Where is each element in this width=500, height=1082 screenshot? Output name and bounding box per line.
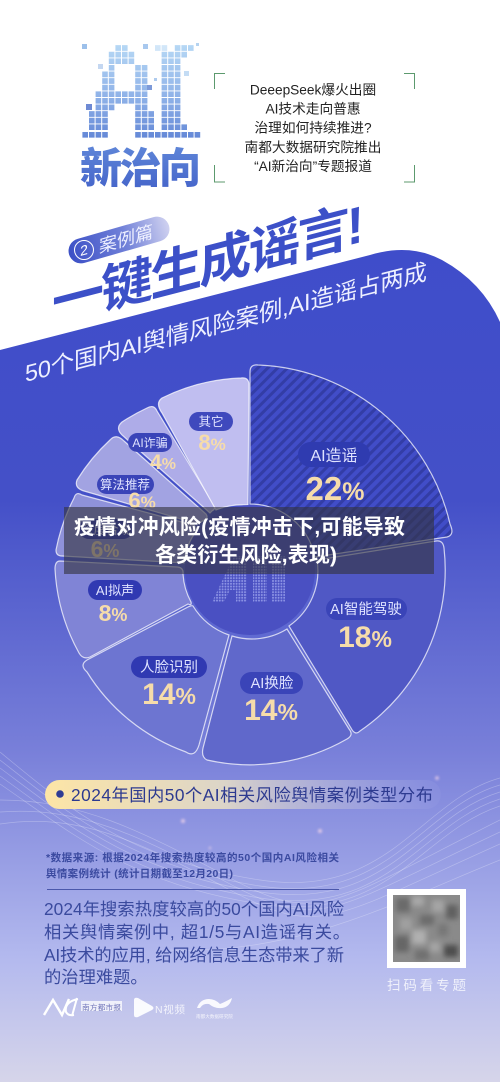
data source note: 舆情案例统计 (统计日期截至12月20日) (46, 867, 233, 880)
data source note (46, 851, 340, 880)
slice: AI诈骗 4%: 4% (150, 451, 176, 474)
logo: 南都大数据研究院: 南都大数据研究院 (196, 1013, 233, 1020)
slice: AI诈骗 4%: AI诈骗 (132, 435, 168, 450)
slice: 其它 8%: 8% (198, 430, 226, 455)
intro copy: DeeepSeek爆火出圈 (250, 82, 376, 98)
scattered pixels (82, 43, 199, 110)
slice: AI造谣 22% (250, 365, 452, 557)
logo: AI pixel mark and 新治向 (80, 43, 201, 192)
pixel letters AI (82, 48, 201, 135)
summary paragraph: 的治理难题。 (44, 967, 148, 987)
section tag: 案例篇 (66, 214, 172, 266)
slice: 人脸识别 14% (83, 606, 229, 754)
slice: 算法推荐 6% (76, 437, 207, 524)
intro text with corner brackets (214, 74, 414, 182)
intro copy: “AI新治向”专题报道 (254, 159, 372, 174)
chart caption pill: 2024年国内50个AI相关风险舆情案例类型分布 (71, 785, 433, 805)
section tag: 案例篇: 2 (80, 242, 88, 260)
slice: 其它 8% (158, 378, 249, 510)
partner logos (44, 998, 233, 1020)
summary paragraph (44, 899, 350, 987)
section tag: 案例篇: 案例篇 (99, 221, 153, 257)
slice: AI智能驾驶 18% (289, 541, 445, 733)
slice: AI换脸 14%: AI换脸 (251, 675, 294, 692)
slice: 深度合成 6%: 深度合成 (81, 522, 131, 537)
slice: 深度合成 6%: 6% (91, 536, 119, 562)
slice: 人脸识别 14%: 人脸识别 (140, 659, 198, 676)
blue curved panel (0, 250, 500, 1082)
summary paragraph: 2024年搜索热度较高的50个国内AI风险 (44, 899, 344, 919)
intro copy: 南都大数据研究院推出 (245, 140, 381, 155)
slice: AI造谣 22%: 22% (306, 470, 364, 507)
slice: AI智能驾驶 18%: AI智能驾驶 (330, 601, 402, 618)
slice: AI换脸 14% (202, 629, 351, 765)
logo: N视频 (134, 998, 186, 1017)
data source note: *数据来源: 根据2024年搜索热度较高的50个国内AI风险相关 (46, 851, 340, 864)
corner brackets (214, 74, 414, 182)
logo: NC (44, 998, 122, 1016)
slice: AI拟声 8% (55, 561, 191, 658)
overlay banner: 各类衍生风险,表现) (155, 543, 337, 567)
slice: 深度合成 6% (56, 494, 197, 563)
summary paragraph: AI技术的应用, 给网络信息生态带来了新 (44, 945, 344, 965)
slice: AI拟声 8%: AI拟声 (96, 583, 134, 598)
slice: 算法推荐 6%: 算法推荐 (100, 477, 150, 492)
slice: AI造谣 22%: AI造谣 (310, 447, 358, 465)
QR code block (387, 889, 466, 993)
intro copy (245, 82, 381, 174)
intro copy: 治理如何持续推进? (254, 121, 372, 136)
chart caption pill (45, 780, 441, 809)
logo: N视频: N视频 (155, 1003, 186, 1016)
glowing stars (181, 776, 439, 849)
subtitle: 50个国内AI舆情风险案例,AI造谣占两成 (25, 259, 427, 388)
logo: 南都大数据研究院 (196, 998, 233, 1020)
slice: 其它 8%: 其它 (198, 414, 224, 429)
QR code block: 扫码看专题 (387, 978, 466, 993)
donut chart (55, 365, 452, 765)
main title: 一键生成谣言! (52, 195, 364, 334)
新治向 wordmark: 新治向 (80, 145, 201, 192)
slice: 人脸识别 14%: 14% (142, 678, 196, 711)
center hub with dotted AI (185, 505, 315, 635)
intro copy: AI技术走向普惠 (265, 102, 361, 116)
decorative wave lines (0, 752, 500, 950)
slice: AI拟声 8%: 8% (99, 600, 127, 626)
summary paragraph: 相关舆情案例中, 超1/5与AI造谣有关。 (44, 922, 350, 942)
logo: NC: 南方都市报 (82, 1002, 121, 1012)
overlay banner (64, 507, 434, 574)
overlay banner: 疫情对冲风险(疫情冲击下,可能导致 (74, 515, 405, 539)
slice: AI换脸 14%: 14% (244, 694, 298, 727)
slice: AI诈骗 4% (118, 407, 215, 513)
slice: 算法推荐 6%: 6% (128, 488, 156, 513)
blurred QR (393, 895, 460, 962)
slice: AI智能驾驶 18%: 18% (338, 621, 392, 654)
